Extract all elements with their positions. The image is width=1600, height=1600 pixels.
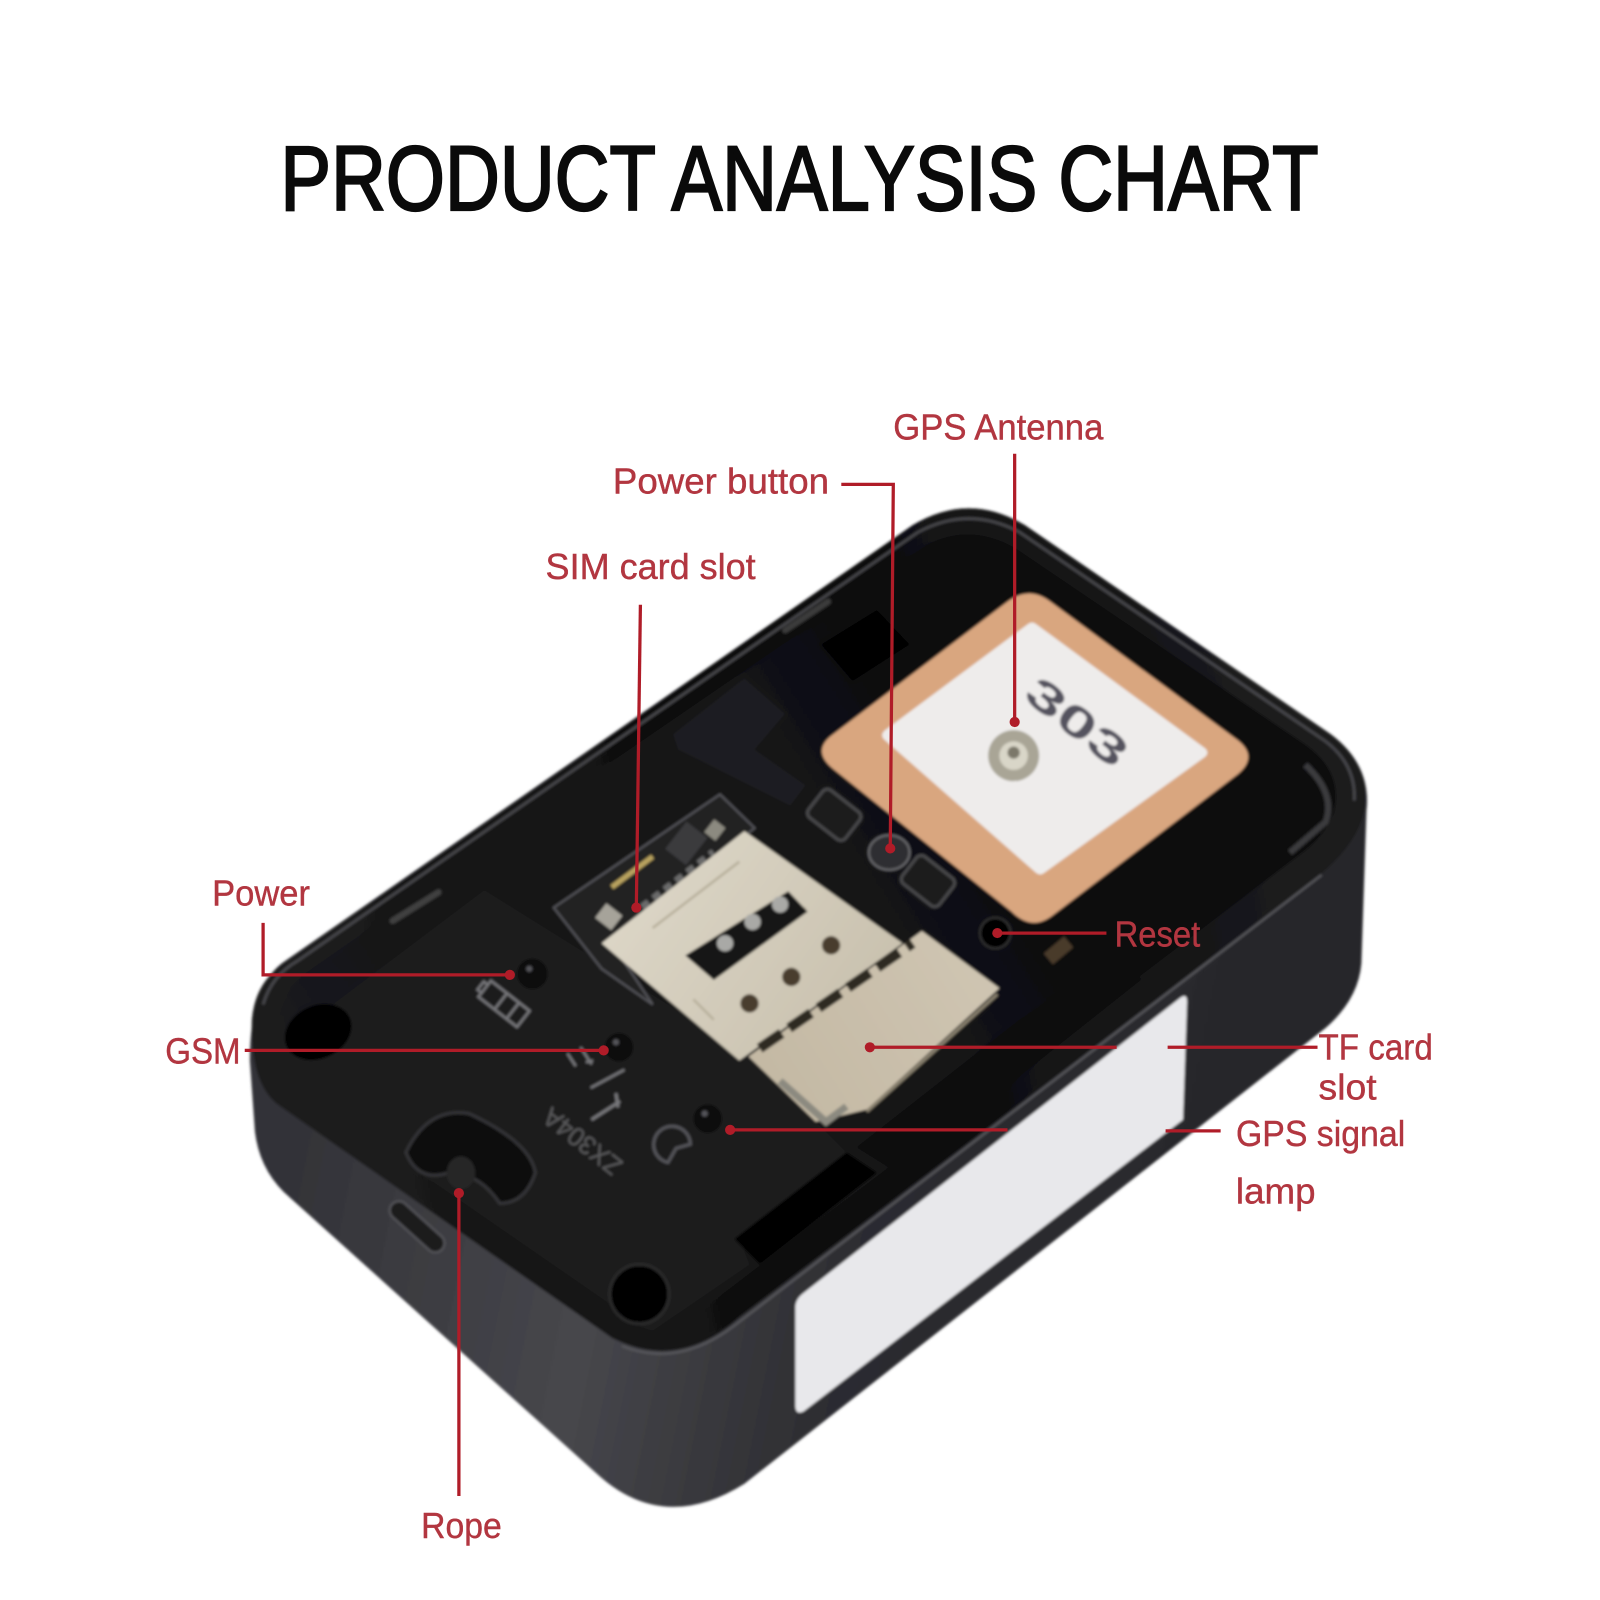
label: SIM card slot — [546, 547, 756, 913]
label: Reset — [992, 914, 1200, 954]
shadow block beside TF socket — [734, 1152, 877, 1264]
label: Rope — [421, 1188, 502, 1546]
white sticker label — [795, 996, 1187, 1413]
label: GSM — [165, 1032, 609, 1072]
battery icon — [474, 978, 530, 1027]
label: GPS signal lamp: GPS signal — [1236, 1114, 1405, 1154]
label: Reset: Reset — [1115, 914, 1200, 954]
label: TF card slot — [865, 1028, 1433, 1107]
rim highlight — [263, 519, 1354, 1004]
signal icon — [559, 1044, 626, 1097]
tactile pads — [805, 787, 863, 843]
right cavity wall highlight — [1290, 765, 1328, 853]
label: SIM card slot: SIM card slot — [546, 547, 756, 587]
label: Power: Power — [212, 874, 310, 914]
antenna feed pin — [988, 730, 1039, 781]
label: Power — [212, 874, 515, 980]
LED: power — [517, 959, 548, 989]
side strap slot — [386, 1197, 448, 1256]
label: GPS signal lamp: lamp — [1236, 1171, 1315, 1211]
label: GPS Antenna — [893, 408, 1104, 727]
SIM contact window — [685, 891, 808, 980]
LED: GSM — [605, 1033, 633, 1062]
screw holes — [610, 1264, 669, 1324]
device top rim — [252, 508, 1365, 1351]
LED: GPS — [693, 1104, 722, 1133]
device photo: GPS tracker — [250, 508, 1367, 1507]
GPS antenna ceramic patch — [822, 593, 1248, 923]
antenna print 303: 303 — [1016, 668, 1138, 778]
label: Power button — [613, 462, 895, 854]
power button — [869, 835, 910, 870]
SIM metal cover — [602, 831, 902, 1061]
strap hole — [406, 1113, 535, 1203]
device photo: GPS tracker: ZX304A — [537, 1101, 628, 1181]
TF card metal socket — [749, 931, 999, 1122]
label: GSM: GSM — [165, 1032, 241, 1072]
device body side — [250, 508, 1367, 1507]
reset button — [980, 918, 1011, 948]
strap post — [447, 1156, 475, 1189]
GPS icon and model print — [654, 1126, 690, 1163]
board ridge — [673, 678, 806, 806]
battery panel — [304, 890, 846, 1331]
label: GPS signal lamp — [725, 1114, 1405, 1211]
dark window near antenna — [821, 610, 910, 681]
label: Power button: Power button — [613, 462, 829, 502]
antenna white face — [882, 623, 1207, 874]
label: TF card slot: slot — [1319, 1067, 1377, 1107]
label: Rope: Rope — [421, 1506, 502, 1546]
small component — [1044, 936, 1073, 964]
SIM connector — [554, 794, 755, 1004]
label: TF card slot: TF card — [1319, 1028, 1433, 1068]
inner cavity — [275, 534, 1336, 1316]
SIM cover holes — [822, 936, 840, 954]
label: GPS Antenna: GPS Antenna — [893, 408, 1104, 448]
title: PRODUCT ANALYSIS CHART — [280, 128, 1319, 230]
